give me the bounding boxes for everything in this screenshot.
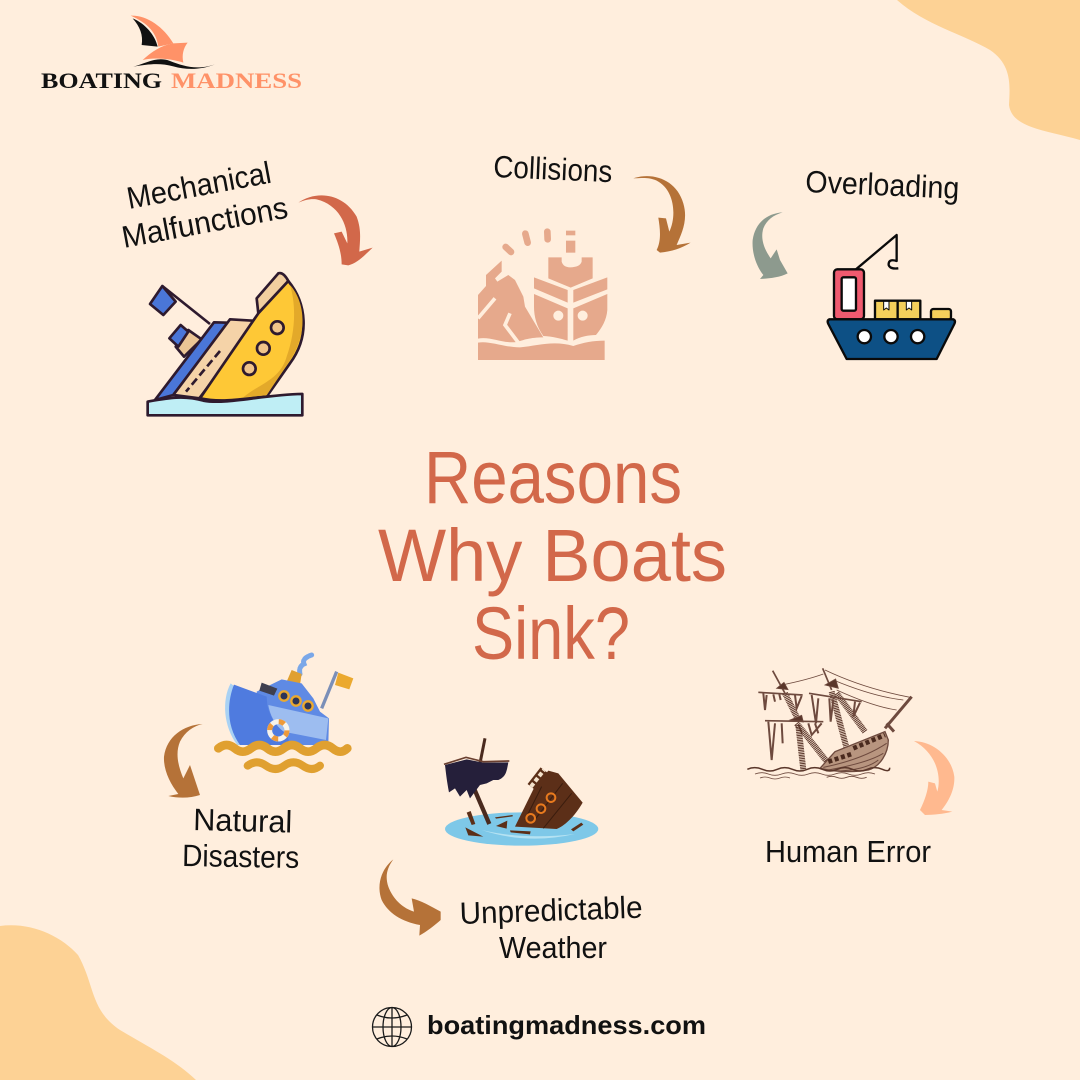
arrow: peach (914, 741, 954, 815)
label: Unpredictable Weather: Weather (499, 930, 607, 965)
icon: globe (372, 1008, 412, 1046)
title: Why Boats (378, 514, 727, 597)
icon: sinking yellow ship (148, 273, 304, 415)
label: Collisions: Collisions (493, 149, 613, 189)
icon: wrecked wooden ship (444, 738, 598, 846)
label: Natural Disasters (182, 802, 299, 875)
decorative blob: top right (897, 0, 1080, 140)
arrow: red (298, 195, 373, 265)
arrow: grey (753, 212, 788, 279)
decorative blob: bottom left (0, 925, 196, 1080)
logo icon (131, 16, 215, 69)
title: Sink? (472, 592, 630, 675)
website url: boatingmadness.com (427, 1010, 706, 1040)
label: Overloading: Overloading (805, 164, 960, 206)
logo (41, 16, 302, 93)
icon: sketched sinking galleon (747, 668, 912, 779)
label: Natural Disasters: Natural (193, 802, 293, 840)
arrow: brown (164, 724, 203, 798)
arrow: brown (379, 859, 441, 936)
icon: ship hitting rock (478, 231, 607, 360)
logo wordmark: BOATING (41, 68, 162, 93)
item: Human Error (747, 668, 954, 869)
label: Unpredictable Weather: Unpredictable (459, 890, 643, 931)
icon: blue boat on waves (218, 655, 353, 769)
label: Natural Disasters: Disasters (182, 838, 299, 875)
item: Overloading (753, 164, 960, 359)
label: Human Error: Human Error (765, 834, 931, 869)
ladder (531, 770, 544, 787)
logo wordmark accent: MADNESS (171, 68, 302, 93)
item: Unpredictable Weather (379, 738, 643, 965)
footer (372, 1008, 706, 1046)
label: Mechanical Malfunctions: Malfunctions (119, 190, 290, 255)
item: Natural Disasters (164, 655, 353, 875)
label: Unpredictable Weather (459, 890, 643, 965)
icon: overloaded cargo ship (828, 235, 955, 359)
title (378, 436, 727, 675)
title: Reasons (424, 436, 682, 519)
arrow: brown (633, 176, 691, 253)
label: Mechanical Malfunctions (119, 155, 290, 255)
item: Mechanical Malfunctions (119, 155, 373, 415)
item: Collisions (478, 149, 691, 360)
label: Mechanical Malfunctions: Mechanical (124, 155, 274, 216)
